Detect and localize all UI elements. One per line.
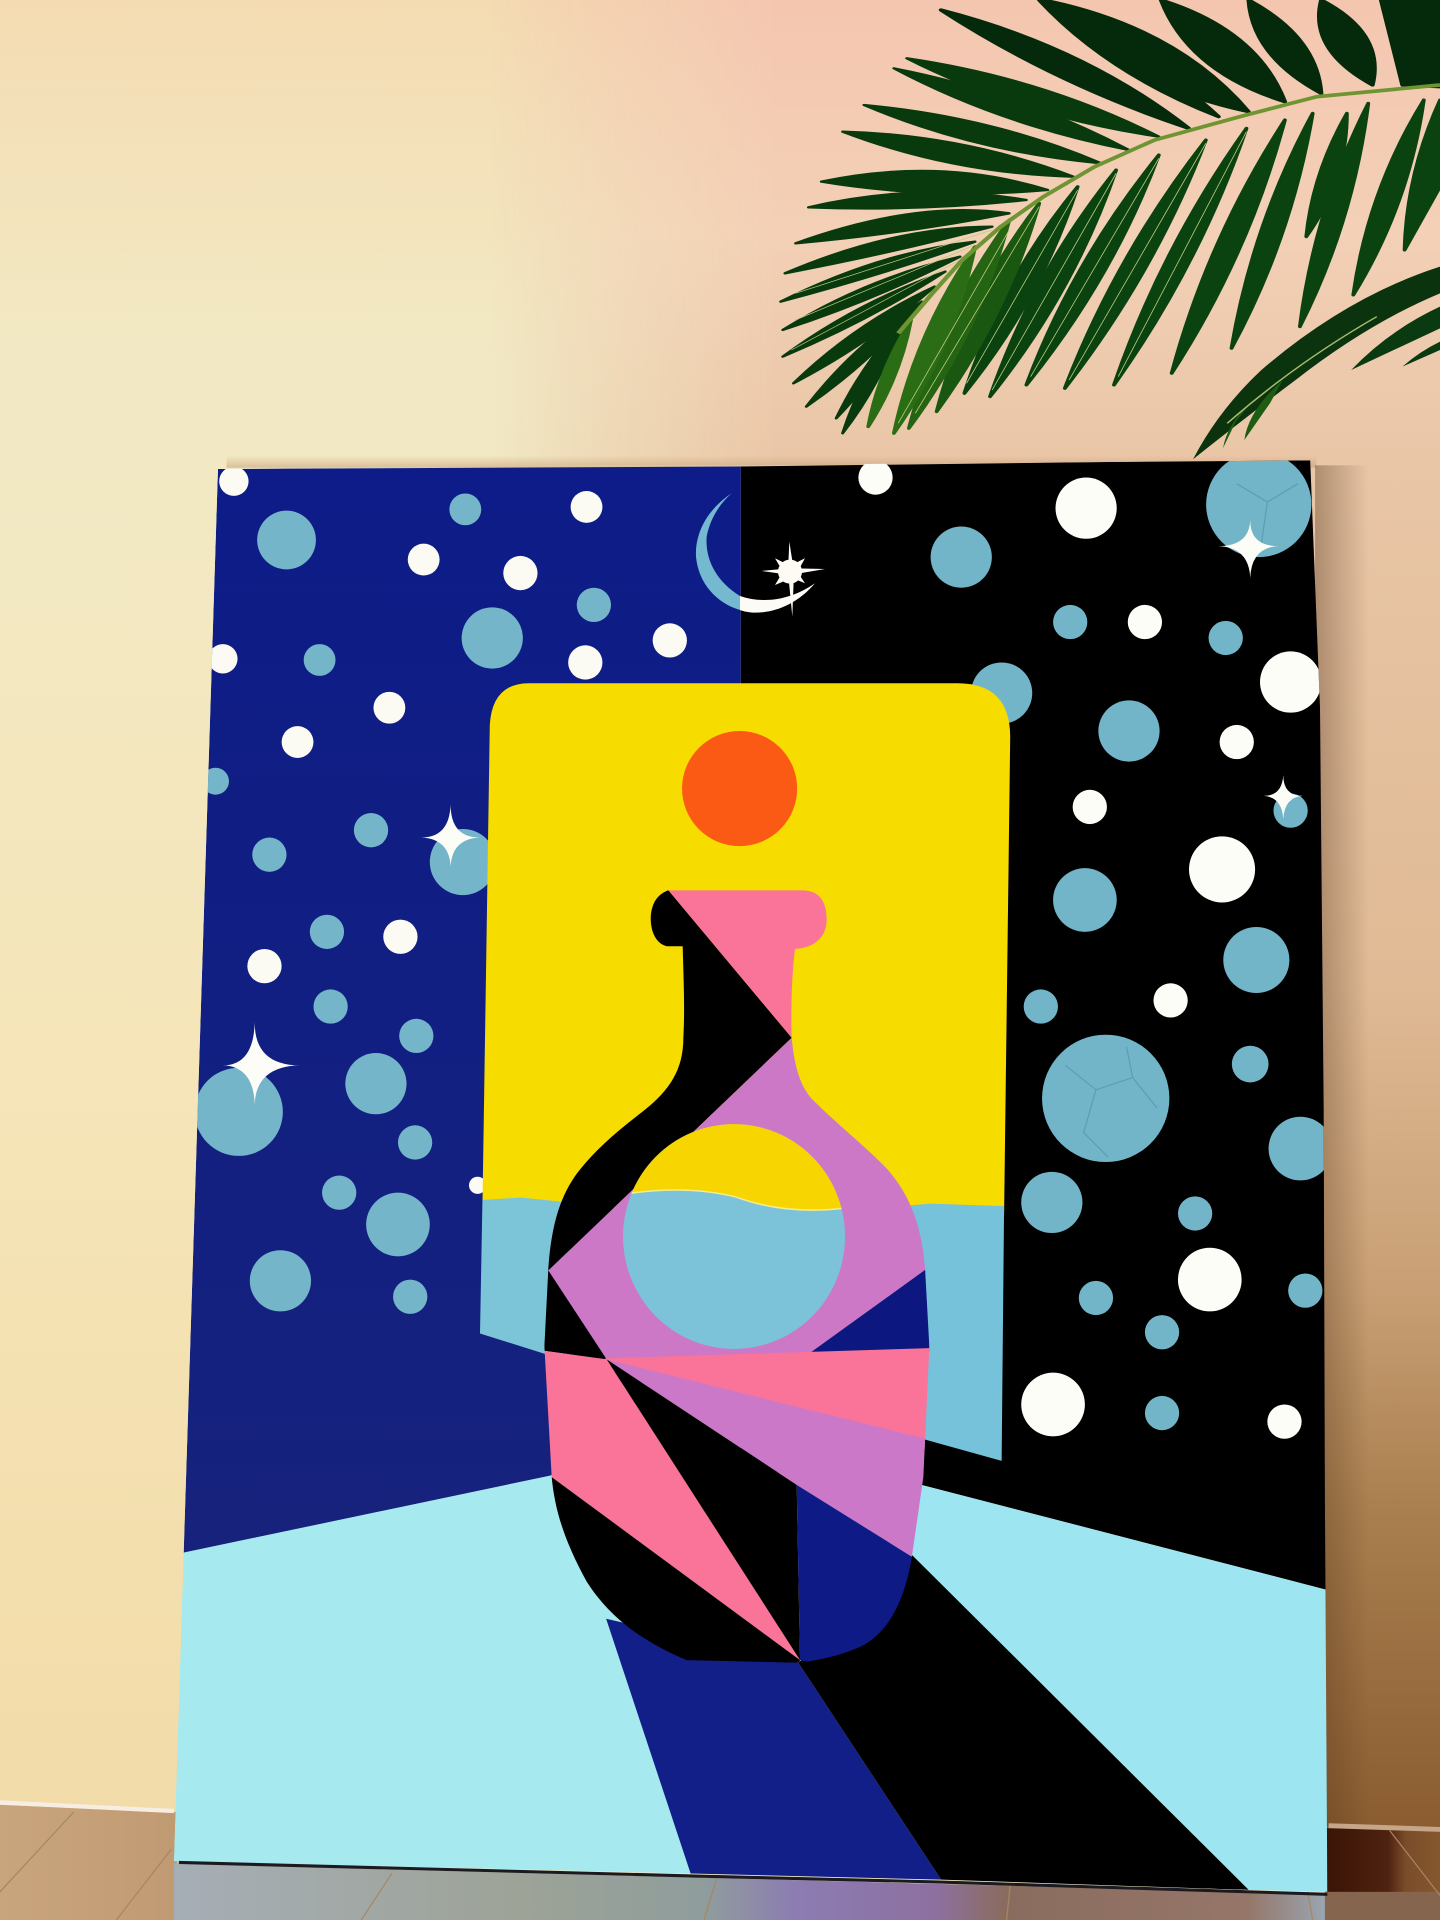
bottle: black centre [607, 1359, 800, 1660]
star left middle [421, 804, 480, 867]
bottle: pink band [605, 1348, 930, 1450]
dots: white circles on black [858, 460, 1321, 1439]
left leaflets [781, 58, 1159, 433]
bottle: black base [552, 1477, 800, 1663]
bottle [544, 890, 930, 1663]
leaflet highlights [791, 132, 1246, 423]
painting canvas [174, 452, 1335, 1898]
bottle: purple lower band [607, 1360, 926, 1557]
star right side [1264, 775, 1303, 819]
bottle body: purple upper [548, 1038, 953, 1372]
star beside moon [762, 542, 825, 617]
floor: black wedge [798, 1555, 1249, 1890]
bottle neck: black [548, 890, 792, 1270]
bottle cap: pink [668, 890, 827, 1038]
painting shadow on wall [1315, 465, 1369, 1827]
bottle orb: yellow and blue [620, 1116, 848, 1352]
star left lower [223, 1022, 300, 1104]
bottle: navy triangle [811, 1270, 930, 1352]
floor: navy wedge [606, 1619, 941, 1880]
palm frond, lower right [1193, 267, 1440, 459]
dots: white circles on navy [208, 467, 687, 1194]
panel: navy night sky [184, 467, 741, 1553]
dots: blue circles on black [931, 452, 1332, 1430]
lower leaflets [868, 100, 1440, 433]
panel: yellow window [482, 683, 1010, 1215]
main rachis [898, 85, 1440, 333]
sun [682, 731, 797, 846]
bottle: black left notch [544, 1270, 606, 1360]
floor: left light blue [174, 1476, 735, 1873]
floor: right light blue [912, 1484, 1335, 1898]
palm frond, main [781, 0, 1440, 433]
bottle: pink left wedge [520, 1347, 800, 1660]
bottle: navy lower right [796, 1484, 912, 1662]
star top right [1218, 520, 1278, 578]
panel: black night sky [741, 459, 1335, 1592]
wooden floor [0, 1802, 1440, 1920]
panel: light blue block left [480, 1198, 569, 1362]
painting bottom edge [179, 1862, 1327, 1894]
upper dark leaflets [941, 0, 1440, 128]
crescent moon [696, 493, 815, 613]
panel: light blue block right [900, 1204, 1004, 1461]
dots: blue circles on navy [195, 493, 611, 1314]
